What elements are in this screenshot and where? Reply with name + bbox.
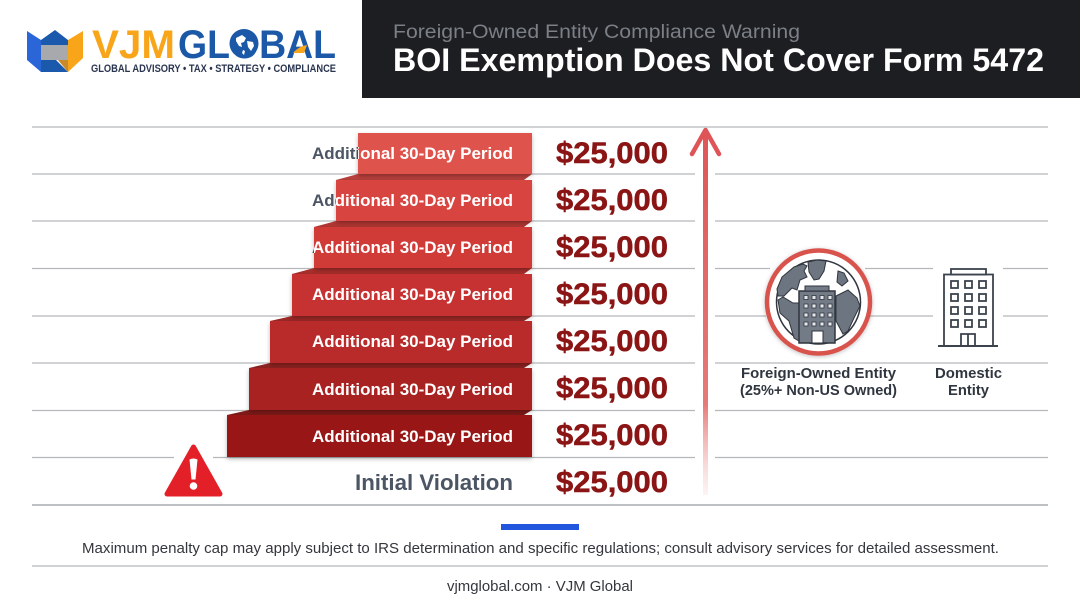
icon: warning triangle	[167, 447, 220, 494]
logo wordmark GLOBAL: GLOBAL	[178, 23, 336, 67]
penalty amounts: $25,000	[556, 278, 668, 311]
grey labels behind bars: Additional 30-Day Period	[312, 144, 513, 163]
icon: foreign-owned entity globe	[767, 250, 870, 354]
white bar labels: Additional 30-Day Period	[312, 285, 513, 304]
white bar labels: Additional 30-Day Period	[312, 144, 513, 163]
initial violation label: Initial Violation	[355, 470, 513, 495]
penalty amounts: $25,000	[556, 419, 668, 452]
penalty amounts: $25,000	[556, 466, 668, 499]
bar: period 1	[227, 415, 532, 457]
white bar labels: Additional 30-Day Period	[312, 380, 513, 399]
white bar labels: Additional 30-Day Period	[312, 332, 513, 351]
bar: period 7	[358, 133, 532, 174]
icon: logo mark	[27, 30, 83, 72]
penalty amounts: $25,000	[556, 137, 668, 170]
logo accent swoosh	[293, 45, 307, 53]
header banner	[362, 0, 1080, 98]
penalty amounts: $25,000	[556, 325, 668, 358]
arrow: rising penalties	[692, 130, 719, 495]
bar: period 3	[270, 321, 532, 363]
header subtitle: Foreign-Owned Entity Compliance Warning	[393, 22, 800, 43]
connector notches	[227, 174, 532, 415]
logo: VJM Global	[27, 23, 336, 75]
white bar labels	[312, 144, 513, 446]
penalty amounts: $25,000	[556, 231, 668, 264]
white bar labels: Additional 30-Day Period	[312, 191, 513, 210]
label: foreign-owned entity: (25%+ Non-US Owned)	[740, 383, 897, 399]
penalty staircase	[227, 133, 532, 495]
bar: period 5	[314, 227, 532, 268]
icon: logo globe	[230, 29, 258, 58]
footnote: Maximum penalty cap may apply subject to IRS determination and specific regulations; consult advisory services for detailed assessment.	[82, 541, 999, 557]
label: domestic entity	[935, 366, 1002, 399]
logo wordmark VJM: VJM	[92, 23, 175, 67]
grey labels behind bars: Additional 30-Day Period	[312, 191, 513, 210]
label: foreign-owned entity	[740, 366, 897, 399]
globe continents	[777, 260, 860, 341]
blue accent bar	[501, 524, 579, 530]
penalty amounts: $25,000	[556, 372, 668, 405]
icon: domestic building	[938, 269, 998, 346]
bar: period 4	[292, 274, 532, 316]
grey labels behind bars	[312, 144, 513, 257]
globe building	[799, 286, 835, 343]
logo tagline: GLOBAL ADVISORY • TAX • STRATEGY • COMPLIANCE	[91, 63, 336, 75]
white bar labels: Additional 30-Day Period	[312, 238, 513, 257]
bar: period 6	[336, 180, 532, 221]
penalty amounts: $25,000	[556, 184, 668, 217]
header title: BOI Exemption Does Not Cover Form 5472	[393, 42, 1044, 78]
footer source: vjmglobal.com · VJM Global	[447, 579, 633, 595]
bar: period 2	[249, 368, 532, 410]
label: domestic entity: Entity	[948, 383, 989, 399]
white bar labels: Additional 30-Day Period	[312, 427, 513, 446]
grey labels behind bars: Additional 30-Day Period	[312, 238, 513, 257]
penalty amounts	[556, 137, 668, 499]
label: domestic entity: Domestic	[935, 366, 1002, 382]
label: foreign-owned entity: Foreign-Owned Entity	[741, 366, 896, 382]
